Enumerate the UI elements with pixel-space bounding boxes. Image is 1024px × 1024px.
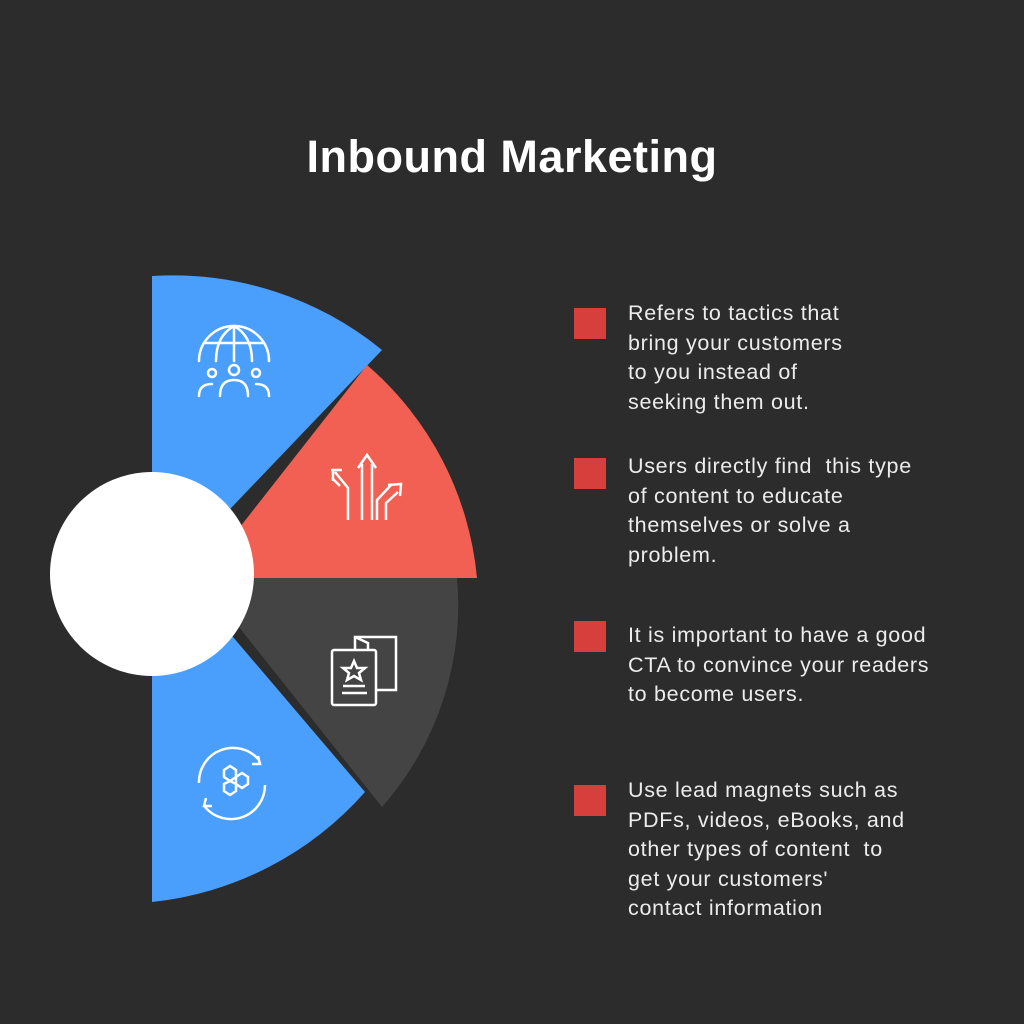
bullet 2 [574,454,912,566]
icon: globe with people [199,326,269,396]
bullet 4 [574,778,905,920]
title: Inbound Marketing [306,131,717,182]
segment: dark gray [200,578,458,807]
text: It is important to have a good CTA to convince your readers to become users. [628,623,929,706]
icon: certificate cards [332,637,396,705]
bullet 1 [574,301,843,414]
center circle [50,472,254,676]
icon: hexagon cycle [199,748,265,819]
icon: diverging arrows [331,455,401,520]
text: Users directly find this type of content to educate themselves or solve a problem. [628,454,912,566]
bullet 3 [574,621,929,706]
segment: red [200,365,477,578]
segment: blue bottom [152,590,365,902]
text: Refers to tactics that bring your customers to you instead of seeking them out. [628,301,843,414]
segment: blue top [152,275,382,560]
text: Use lead magnets such as PDFs, videos, eBooks, and other types of content to get your customers' contact information [628,778,905,920]
